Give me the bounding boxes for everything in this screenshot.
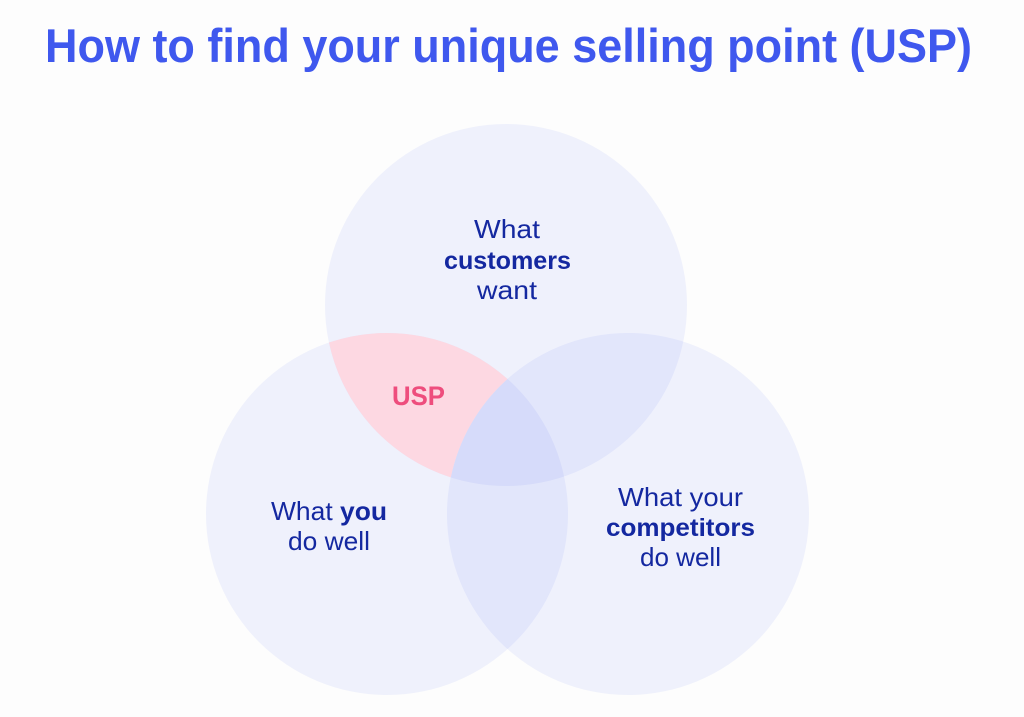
label: customers: What [474,214,541,244]
circle: what customers want [325,124,687,486]
label: USP: USP [392,381,445,411]
label: do well left: do well [288,526,370,556]
title: How to find your unique selling point (USP) [45,19,972,72]
label: customers bold: customers [444,247,571,275]
label: what you: What you [271,496,387,526]
label: want: want [476,275,538,305]
circle: what your competitors do well [447,333,809,695]
label: what your: What your [618,482,743,512]
circle: what you do well [206,333,568,695]
venn diagram [206,124,809,695]
label: do well right: do well [640,542,721,572]
label: competitors: competitors [606,514,755,542]
USP overlap region [329,333,508,477]
